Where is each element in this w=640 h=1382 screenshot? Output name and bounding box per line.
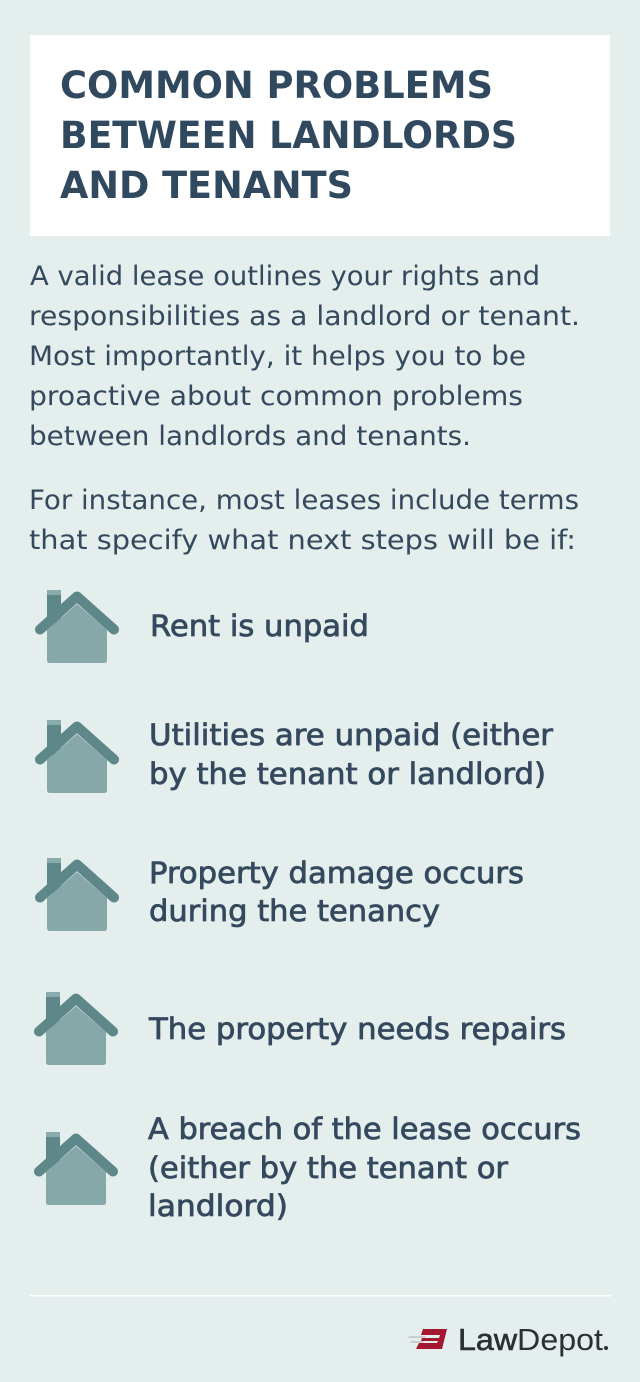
- list item: utilities: [40, 718, 553, 793]
- list item: rent: [40, 590, 369, 663]
- icon: house: [39, 992, 113, 1065]
- intro paragraph: proactive about common problems: [29, 381, 523, 412]
- list item: property damage: [40, 856, 524, 931]
- icon: house: [39, 1132, 113, 1205]
- intro paragraph: Most importantly, it helps you to be: [29, 341, 526, 372]
- icon: logo mark: [408, 1329, 447, 1349]
- second paragraph: For instance, most leases include terms: [29, 485, 579, 516]
- list item: repairs: [39, 992, 566, 1065]
- title: [30, 35, 610, 236]
- icon: house: [40, 590, 114, 663]
- title: COMMON PROBLEMS: [60, 64, 493, 107]
- list item: utilities: Utilities are unpaid (either: [149, 718, 553, 752]
- title: AND TENANTS: [60, 164, 353, 207]
- list item: utilities: by the tenant or landlord): [149, 757, 546, 791]
- list item: rent: Rent is unpaid: [150, 609, 369, 643]
- list item: property damage: Property damage occurs: [149, 856, 524, 890]
- intro paragraph: [29, 261, 580, 452]
- intro paragraph: between landlords and tenants.: [29, 421, 471, 452]
- list item: breach: (either by the tenant or: [148, 1151, 508, 1185]
- list item: breach: landlord): [148, 1189, 288, 1223]
- title: BETWEEN LANDLORDS: [60, 114, 517, 157]
- list item: repairs: The property needs repairs: [148, 1012, 566, 1046]
- logo: LawDepot: LawDepot: [458, 1322, 603, 1357]
- list item: breach: A breach of the lease occurs: [148, 1112, 581, 1146]
- list item: breach: [39, 1112, 581, 1223]
- intro paragraph: responsibilities as a landlord or tenant.: [29, 301, 580, 332]
- intro paragraph: A valid lease outlines your rights and: [30, 261, 540, 292]
- second paragraph: [29, 485, 579, 556]
- icon: house: [40, 720, 114, 793]
- icon: house: [40, 858, 114, 931]
- second paragraph: that specify what next steps will be if:: [29, 525, 576, 556]
- list item: property damage: during the tenancy: [149, 894, 440, 928]
